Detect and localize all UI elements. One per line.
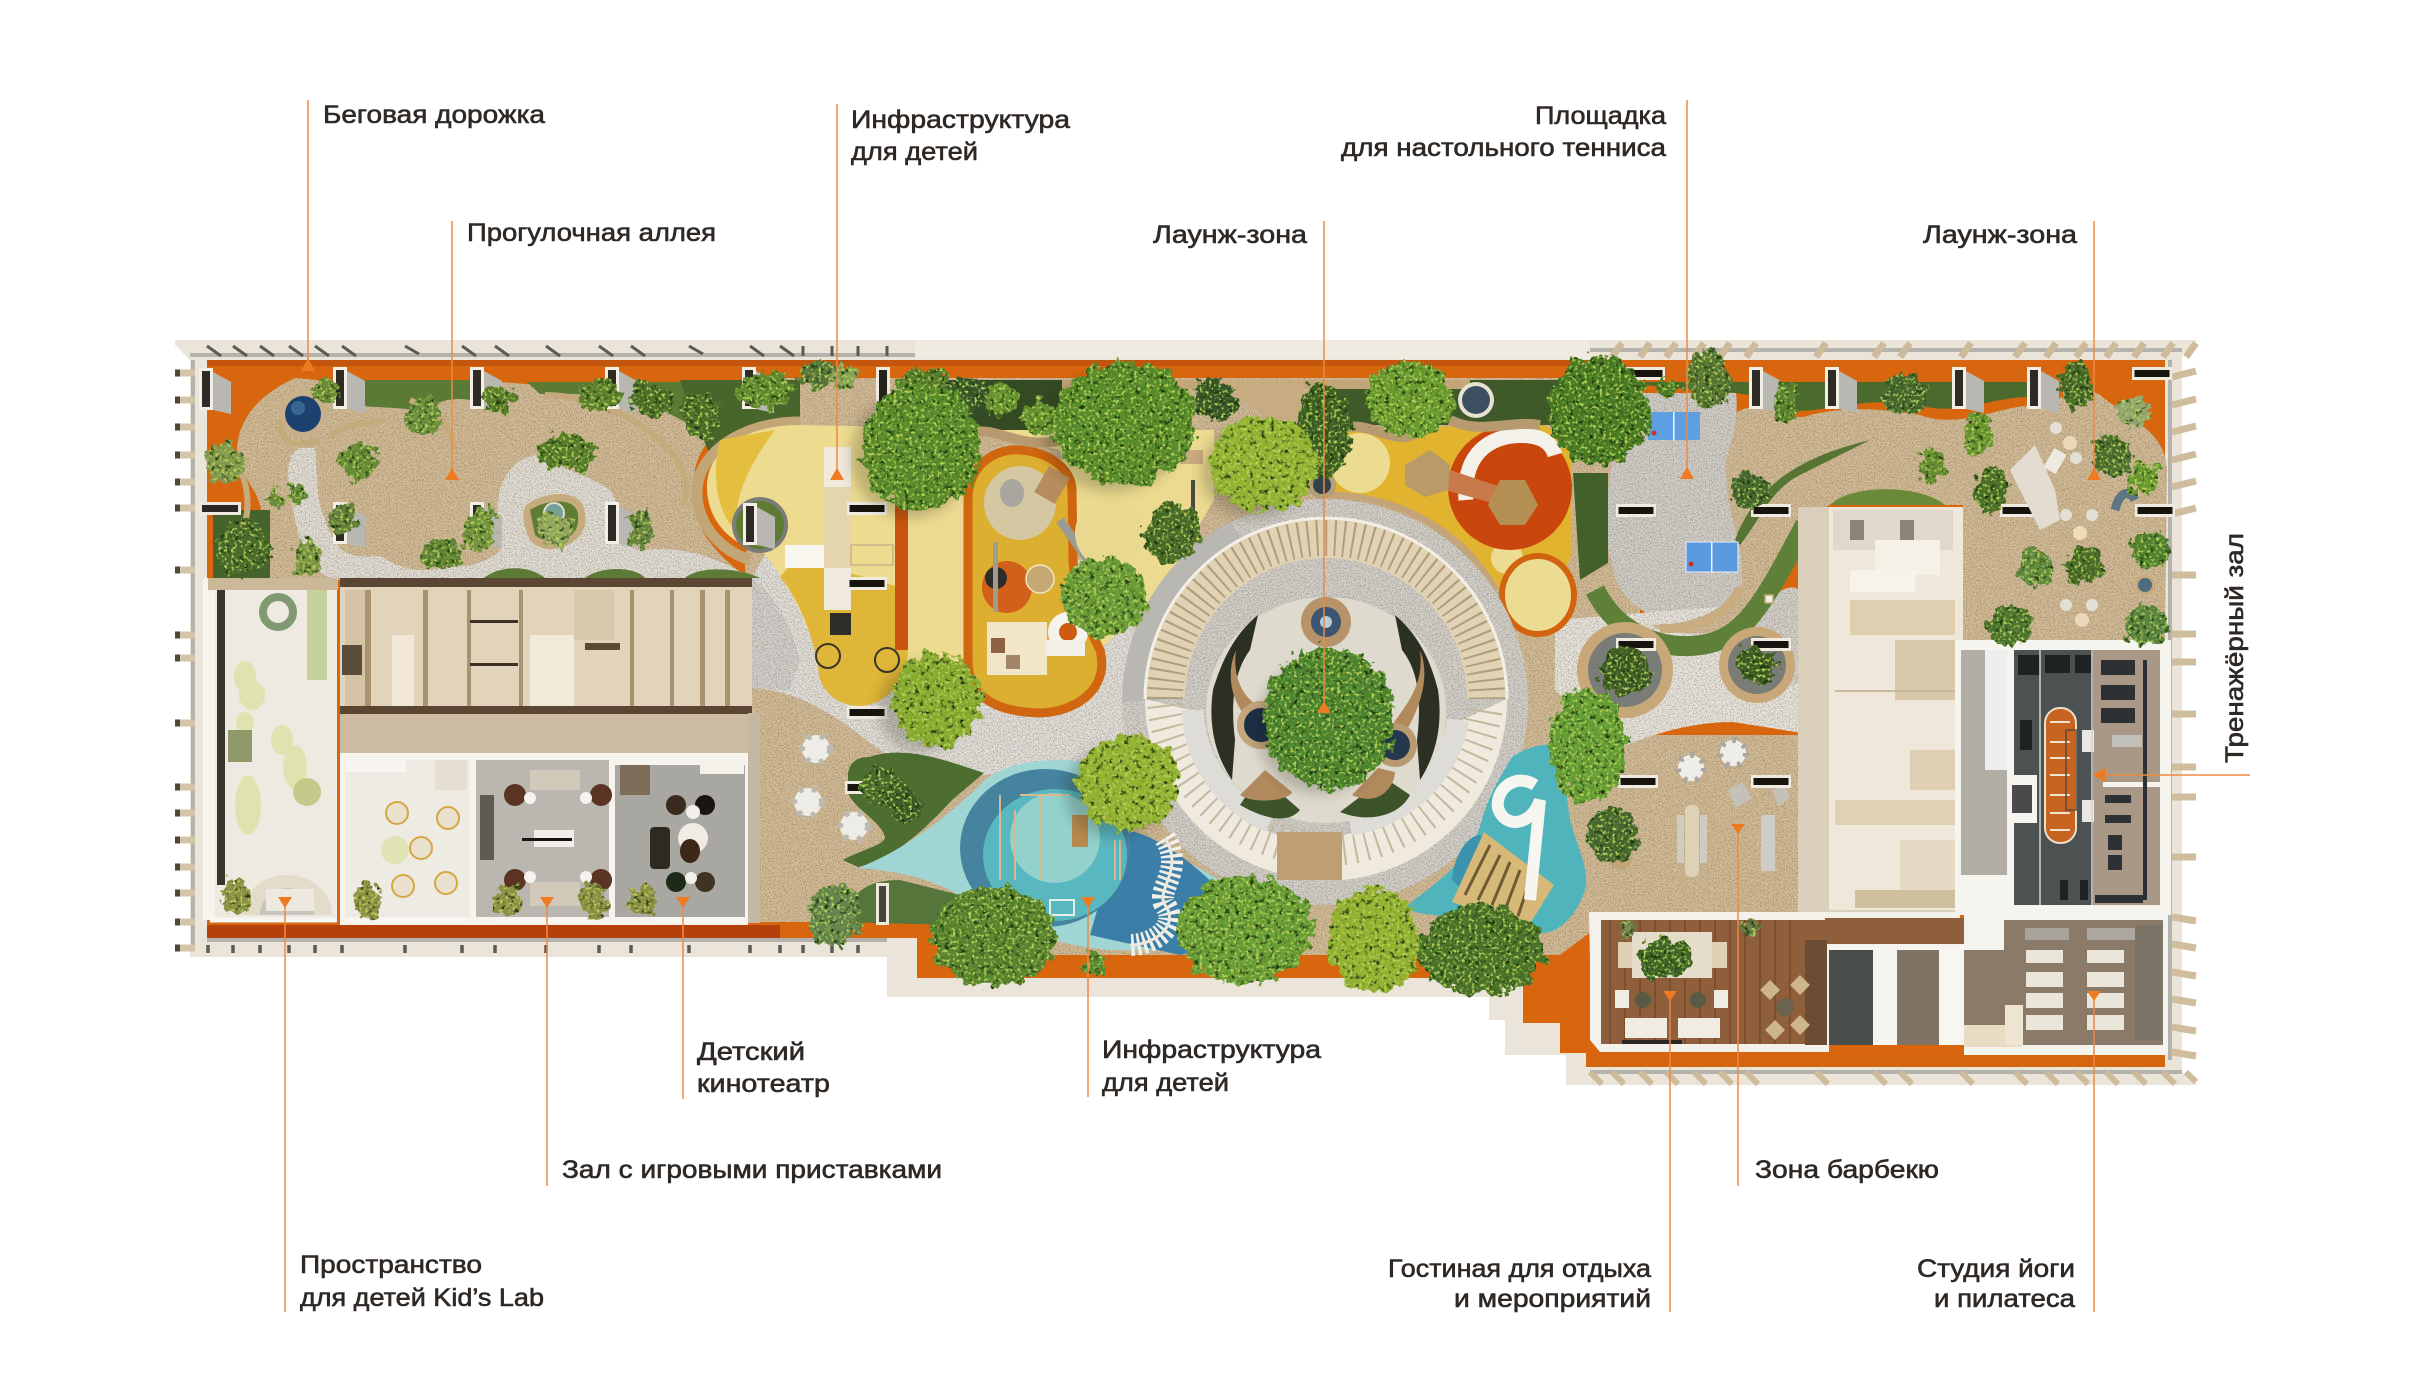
bed: arc around tennis: [1595, 525, 1805, 646]
climbing tower: [785, 447, 899, 672]
tree shadows: [850, 372, 1384, 838]
wooden pyramid: [1452, 832, 1554, 927]
bed: upper-right of left garden: [680, 380, 800, 460]
callout: Инфраструктура для детей, низ: Инфраструктура: [1102, 1036, 1321, 1064]
stair steps bottom half: [1145, 699, 1507, 880]
bed: top hedge left: [335, 380, 740, 425]
kids house: [987, 612, 1088, 675]
orange terrace floor: [207, 360, 2165, 1067]
left garden furniture and pools: [199, 367, 800, 560]
bushes left garden: [205, 372, 793, 575]
small round vent at rotunda top: [1308, 471, 1336, 499]
orange track: [2045, 708, 2094, 843]
panel: water-themed play zone: [858, 760, 1220, 955]
panel: stair building core: [1798, 507, 1963, 915]
panel: table tennis and lounge garden: [1577, 367, 2175, 718]
ground surfaces: [237, 378, 2167, 955]
pale strip and mid yellow: [908, 430, 1214, 670]
yellow zone right of the rotunda: [976, 420, 1574, 634]
room: kids cinema: [615, 760, 745, 917]
vents strip on sand: [748, 713, 760, 923]
edge ticks: [175, 343, 2196, 1084]
callout: Студия йоги и пилатеса: [1917, 991, 2101, 1313]
inner court: [1206, 597, 1446, 823]
bed: left strip: [213, 510, 270, 578]
callout: Пространство для детей Kid's Lab: для детей Kid’s Lab: [300, 1284, 544, 1312]
callout: Студия йоги и пилатеса: Студия йоги: [1917, 1255, 2075, 1283]
callout: Детский кинотеатр: [676, 897, 830, 1099]
fountain left: [1237, 701, 1285, 749]
planting beds: [213, 380, 2060, 925]
trees: [861, 384, 981, 510]
bed: central hedge: [905, 380, 1190, 430]
bed: teal side: [843, 753, 984, 867]
callout: Зона барбекю: Зона барбекю: [1755, 1156, 1939, 1184]
bed: lower tables: [843, 880, 1000, 925]
trees and bushes: [205, 352, 2170, 994]
wood rings with planters: [1577, 622, 1795, 718]
callout: Беговая дорожка: [301, 100, 545, 371]
callout: Детский кинотеатр: Детский: [697, 1038, 805, 1066]
callout: Гостиная для отдыха и мероприятий: [1388, 991, 1677, 1313]
callout: Гостиная для отдыха и мероприятий: и мероприятий: [1454, 1285, 1651, 1313]
callout: Площадка для настольного тенниса: [1341, 100, 1694, 479]
callout: Беговая дорожка: Беговая дорожка: [323, 101, 545, 129]
pool: small with bushes: [523, 494, 585, 549]
callout: Зал с игровыми приставками: Зал с игровыми приставками: [562, 1156, 942, 1184]
panel: rotunda with pergola and amphitheatre: [1122, 499, 1528, 905]
panel: gym: [1955, 640, 2171, 915]
small orange circle: [1502, 556, 1574, 634]
gravel lobe below tennis: [1740, 587, 1815, 690]
callout: Лаунж-зона, центр: Лаунж-зона: [1153, 221, 1307, 249]
panel: building block with Kid's Lab and game rooms: [203, 578, 760, 925]
callout: Тренажёрный зал: Тренажёрный зал: [2221, 533, 2249, 763]
bushes right garden: [1599, 352, 2170, 696]
callout: Тренажёрный зал: [2093, 533, 2250, 782]
callout: Лаунж-зона, центр: [1153, 221, 1331, 713]
callout: Инфраструктура для детей, верх: Инфраструктура: [851, 106, 1070, 134]
white slide: [1498, 781, 1540, 900]
roof block: [340, 578, 752, 753]
bed: lower edge strip: [484, 568, 760, 578]
callout: Детский кинотеатр: кинотеатр: [697, 1070, 830, 1098]
central sand ground: [745, 378, 1829, 955]
white dividers and rooms: [340, 753, 748, 925]
vents: [1616, 367, 2175, 517]
callout: Инфраструктура для детей, низ: для детей: [1102, 1069, 1229, 1097]
red circle with sofa: [1405, 426, 1572, 550]
oval play zone: [968, 450, 1203, 713]
light path near wings: [1555, 600, 1815, 748]
floor plan of the roof terrace: [175, 340, 2197, 1085]
callout: Инфраструктура для детей, верх: [830, 104, 1070, 480]
left garden sand: [237, 378, 760, 580]
panel: service rooms: [1829, 945, 1964, 1045]
callout: Площадка для настольного тенниса: Площадка: [1535, 102, 1666, 130]
tennis court gravel: [1607, 393, 1742, 620]
callout: Лаунж-зона, справа: [1923, 221, 2101, 480]
tables near central path: [794, 367, 2172, 925]
room: Kid's playroom: [345, 760, 470, 917]
kids lab room: [203, 578, 338, 920]
callout: Пространство для детей Kid's Lab: [278, 897, 544, 1312]
plan silhouette: cream outer strip: [175, 340, 2197, 1085]
callout: Прогулочная аллея: Прогулочная аллея: [467, 219, 716, 247]
room: game console hall: [476, 760, 612, 917]
panel: children play zone, yellow: [707, 425, 1214, 713]
wooden bench edges: [240, 395, 686, 530]
round vent top right: [1458, 382, 1494, 418]
fountain top: [1301, 597, 1351, 647]
pergola top half: [1145, 518, 1507, 699]
lounge furniture: [1765, 422, 2155, 627]
right sand garden: [1650, 392, 2167, 640]
right side path vents: [1625, 367, 1665, 380]
bushes in rooms: [223, 879, 1760, 978]
table tennis tables: [1648, 412, 1738, 572]
panel: barbecue zone: [1608, 638, 1791, 877]
callout: Пространство для детей Kid's Lab: Пространство: [300, 1251, 482, 1279]
panel: right teal play zone: [1405, 745, 1586, 933]
callout: Студия йоги и пилатеса: и пилатеса: [1934, 1285, 2075, 1313]
callout: Прогулочная аллея: [445, 219, 716, 480]
cafe tables: [794, 735, 868, 840]
panel: yoga and pilates studio: [1964, 915, 2168, 1055]
grey round vent with plants: [732, 497, 788, 553]
left garden white walkways: [288, 448, 752, 578]
callout: Зона барбекю: [1731, 824, 1939, 1186]
grey central path: [752, 545, 1210, 810]
fountain right: [1373, 723, 1417, 767]
bed bushes near tables: [860, 765, 1105, 977]
callout: Инфраструктура для детей, верх: для детей: [851, 138, 978, 166]
callout: Площадка для настольного тенниса: для настольного тенниса: [1341, 134, 1666, 162]
callout: Инфраструктура для детей, низ: [1081, 897, 1321, 1097]
panel: lounge and events hall: [1589, 912, 2004, 1052]
vent boxes left garden: [199, 367, 774, 548]
spiral stair: [1130, 838, 1172, 945]
callout: Зал с игровыми приставками: [540, 897, 942, 1186]
pool: blue round: [279, 390, 327, 438]
callout: Лаунж-зона, справа: Лаунж-зона: [1923, 221, 2077, 249]
yellow zone one: [707, 425, 908, 706]
white balcony bars: [210, 918, 743, 922]
bushes mid tree line: [800, 361, 1237, 438]
callout: Гостиная для отдыха и мероприятий: Гостиная для отдыха: [1388, 1255, 1651, 1283]
